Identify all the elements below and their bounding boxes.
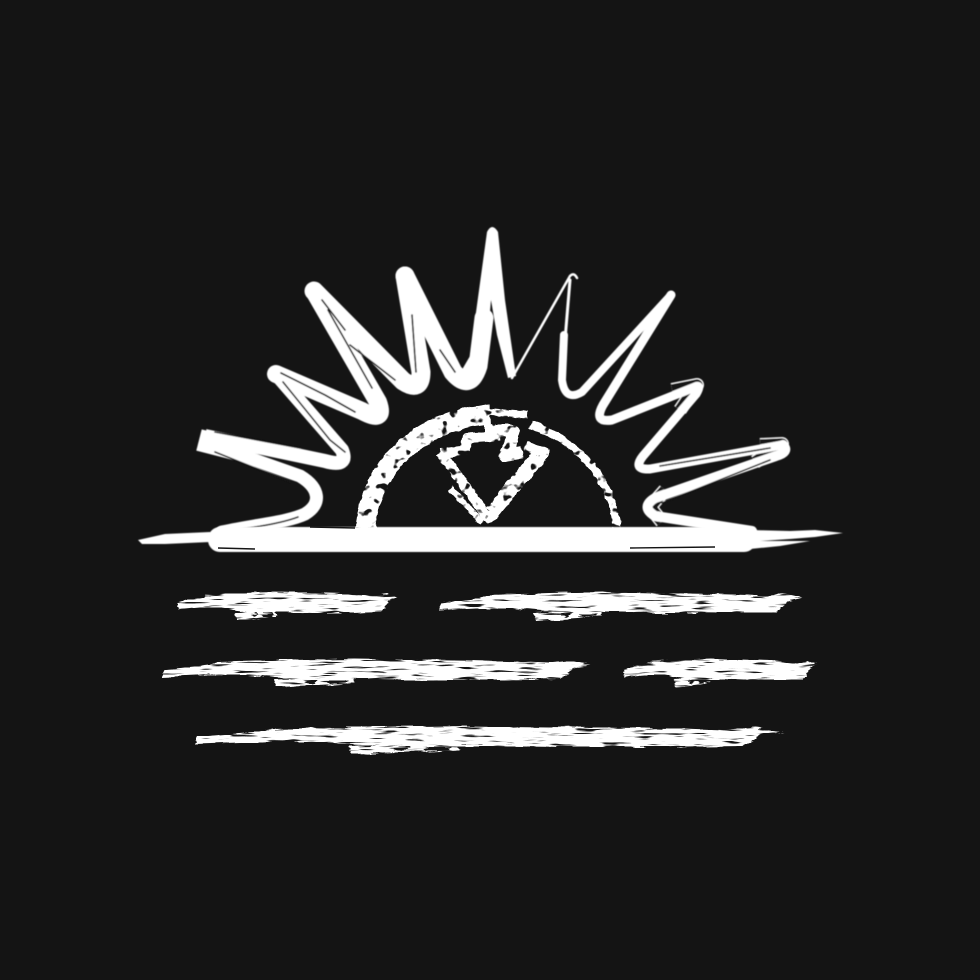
sun dome xyxy=(366,410,617,528)
horizon xyxy=(138,527,843,552)
dome left band xyxy=(366,415,490,528)
sun rays xyxy=(199,227,785,532)
horizon scratches xyxy=(218,527,715,549)
ray: left upper zigzag xyxy=(205,374,344,463)
emblem outline xyxy=(441,436,545,519)
water stroke 1 xyxy=(178,592,397,620)
dome right band xyxy=(531,425,617,528)
emblem top blob xyxy=(485,431,522,455)
dome top fragment xyxy=(470,410,527,415)
left wisp xyxy=(138,532,210,544)
ray: thin centre-right spike xyxy=(512,274,577,378)
ray: far left blunt tip xyxy=(199,440,250,453)
water stroke 3 xyxy=(163,659,590,687)
water stroke 5 xyxy=(196,726,784,754)
ray scratches xyxy=(215,300,770,530)
emblem inner stroke xyxy=(450,488,482,522)
water strokes xyxy=(163,592,817,754)
water stroke 4 xyxy=(624,659,817,687)
water stroke 2 xyxy=(440,592,802,620)
ray: right zigzag xyxy=(562,295,671,395)
ray: centre peak xyxy=(456,227,516,386)
right wisps xyxy=(750,530,843,549)
ray tip halos xyxy=(650,385,782,522)
ray: far left with base curve xyxy=(212,445,316,532)
emblem: maple leaf arrow xyxy=(441,431,545,522)
emblem right fill xyxy=(492,457,538,512)
horizon bar xyxy=(208,527,756,552)
